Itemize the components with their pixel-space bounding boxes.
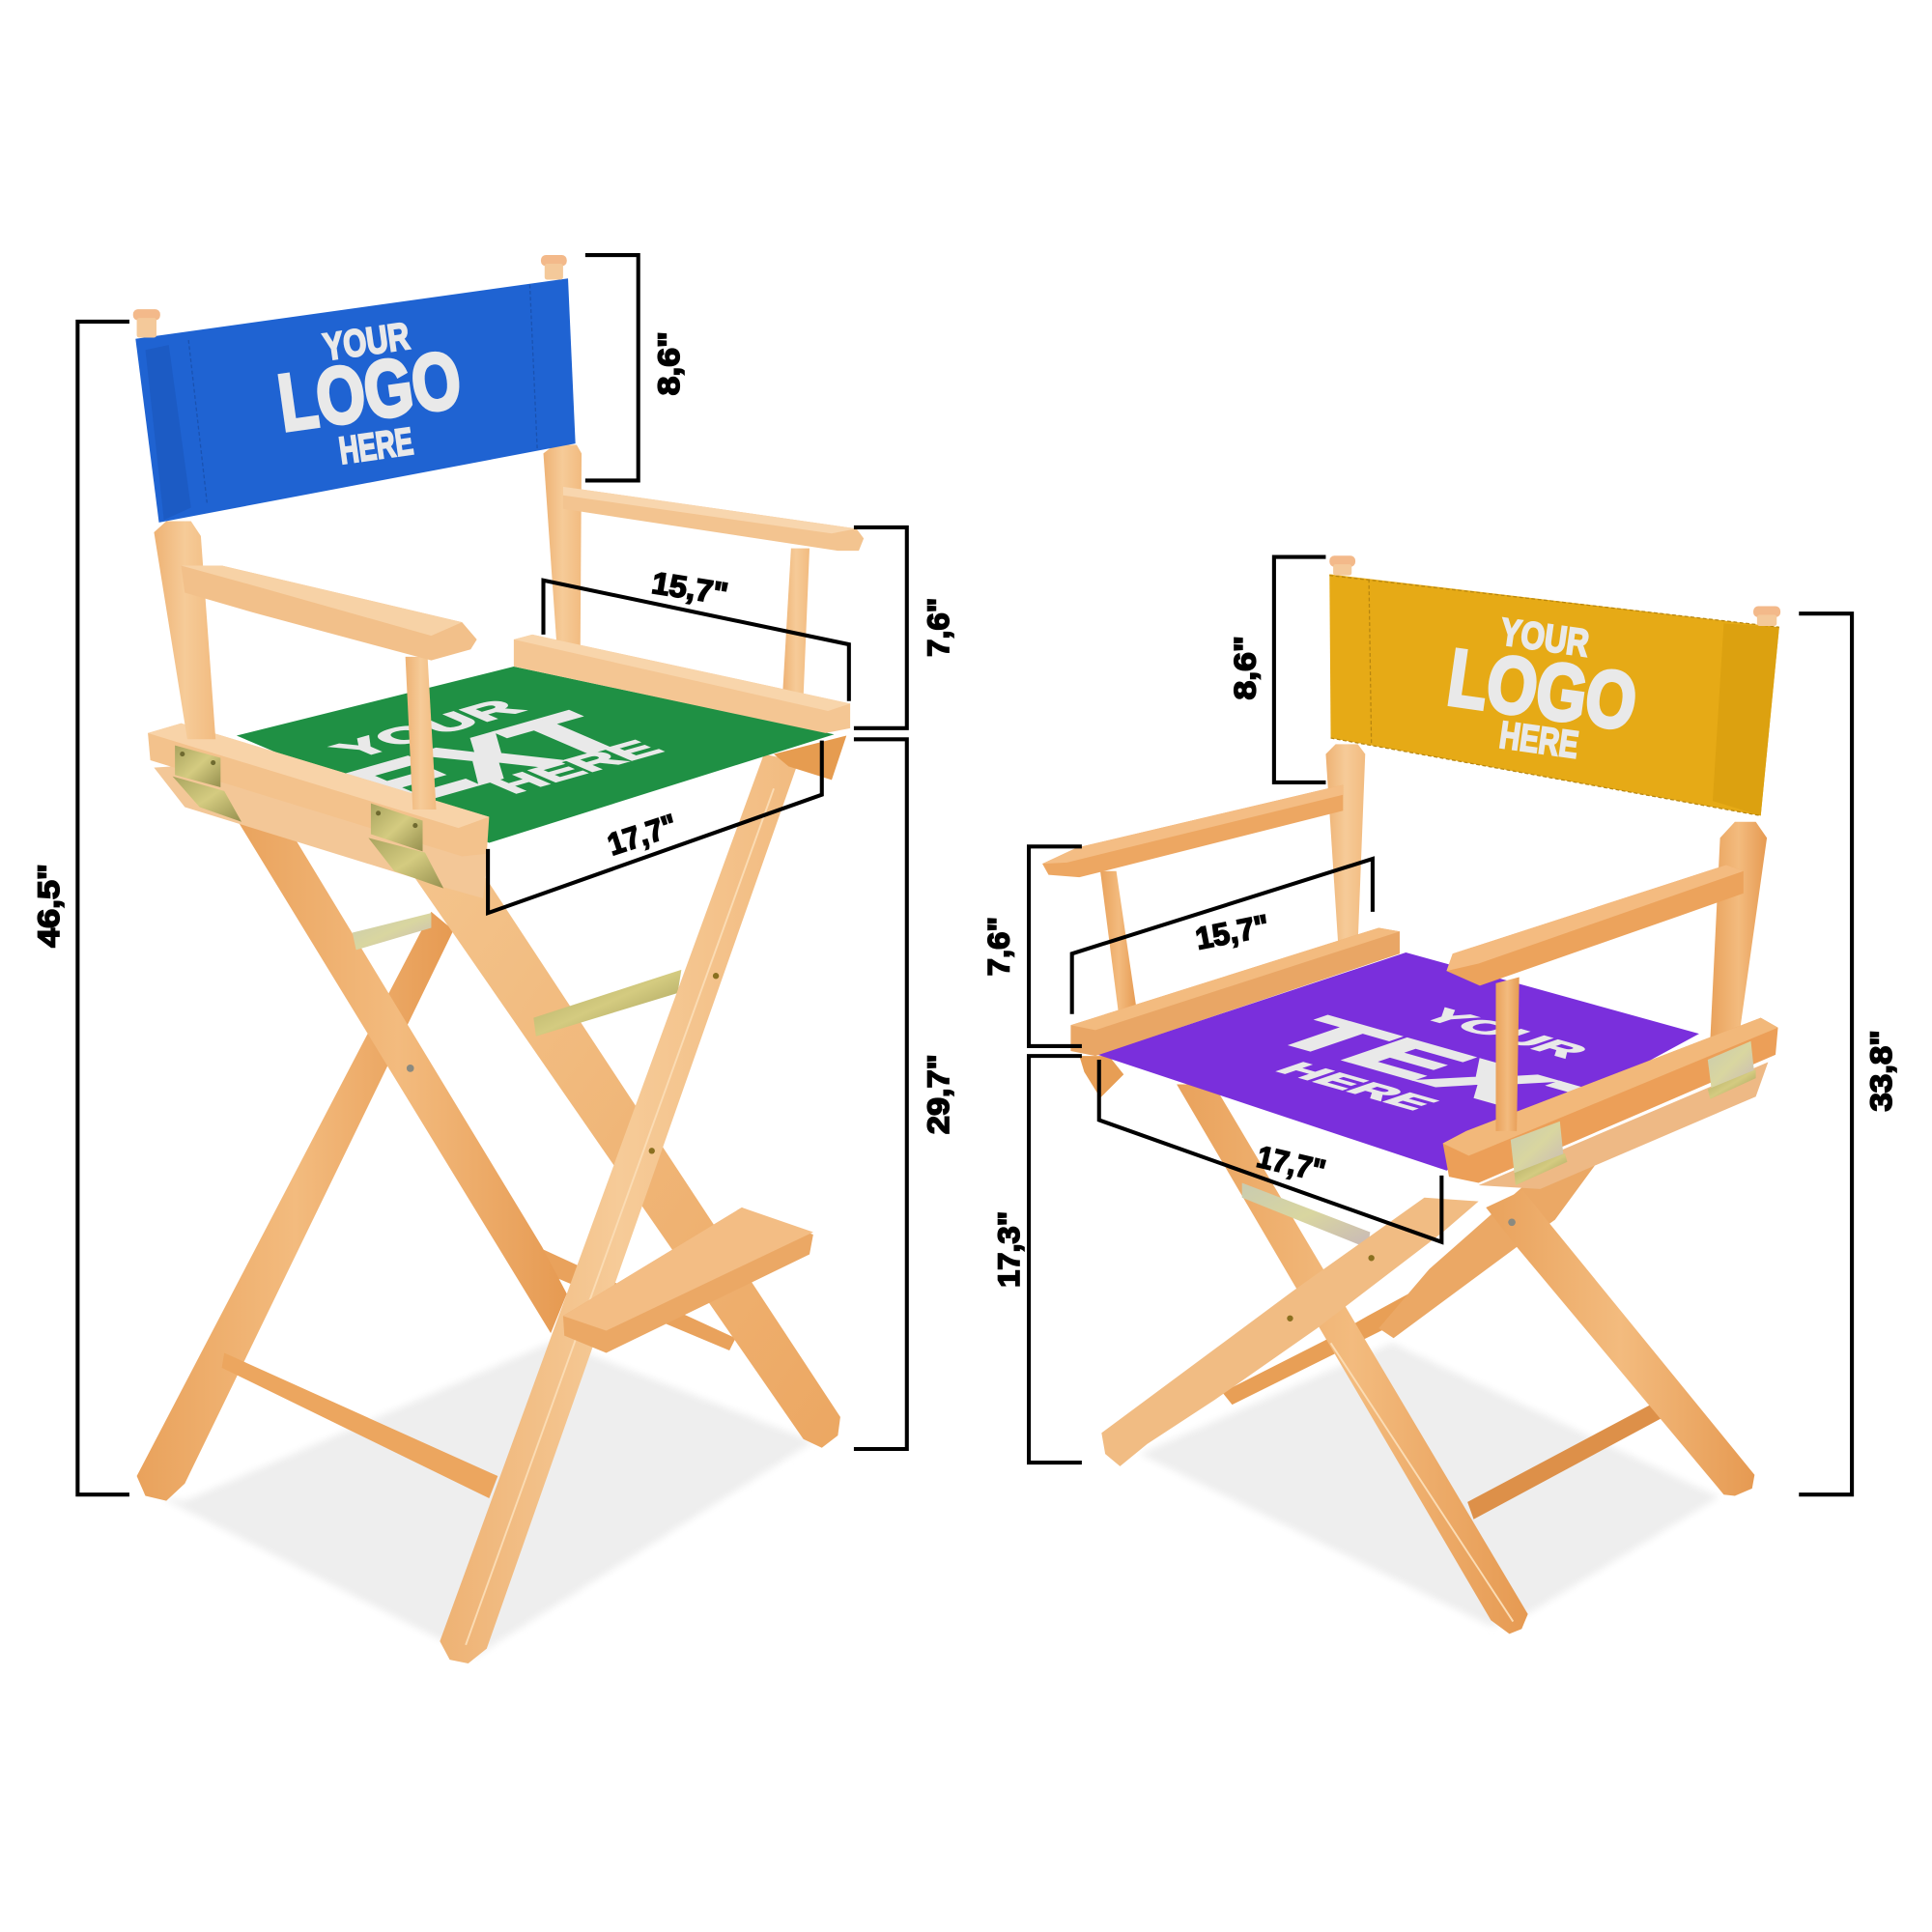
left armrest <box>1042 784 1343 877</box>
tall chair with blue back and green seat <box>133 255 864 1663</box>
right arm support <box>1495 977 1520 1131</box>
corner block <box>1079 1056 1123 1097</box>
dimension: seat depth 17,7 <box>488 741 822 913</box>
back post knobs <box>1329 555 1780 626</box>
left post <box>154 522 215 739</box>
hinges <box>173 746 443 889</box>
dimension: seat height 17,3 <box>991 1056 1082 1463</box>
left armrest <box>182 565 477 661</box>
lower seat rail <box>154 766 489 898</box>
standard chair with yellow back and purple seat <box>1042 555 1780 1634</box>
dimension: arm height 7,6: 7,6" <box>921 598 955 657</box>
dimension: seat depth 17,7 <box>1099 1060 1441 1242</box>
leg to right foot <box>1486 1190 1754 1495</box>
dimension: seat height 29,7 <box>854 739 955 1449</box>
main tall leg <box>440 754 799 1663</box>
dimension: seat depth 17,7: 17,7" <box>604 808 681 862</box>
back print: your logo here: YOUR <box>1497 611 1592 665</box>
near seat rail <box>148 724 489 856</box>
back canvas: yellow <box>1329 574 1779 815</box>
back leg <box>1378 1146 1609 1338</box>
seat print: your text here <box>327 701 665 798</box>
seat print: your text here: TEXT <box>1245 1009 1651 1130</box>
dimension: overall height 46,5 <box>31 322 129 1494</box>
rear diagonal leg <box>412 863 840 1448</box>
dimension: overall height 46,5: 46,5" <box>31 864 66 948</box>
near seat rail <box>1443 1018 1778 1182</box>
dimension: seat height 29,7: 29,7" <box>921 1054 955 1134</box>
dimension: seat height 17,3: 17,3" <box>991 1211 1026 1288</box>
lower seat rail <box>1479 1062 1768 1189</box>
footrest <box>563 1208 813 1353</box>
far seat rail <box>1070 927 1400 1056</box>
back canvas: blue <box>135 278 576 523</box>
seat print: your text here <box>1275 1007 1585 1111</box>
seat print: your text here: TEXT <box>240 702 657 837</box>
seat print: your text here: YOUR <box>1410 1006 1599 1062</box>
back curved stretcher <box>1222 1285 1433 1405</box>
back print: your logo here: HERE <box>1497 714 1581 767</box>
right post <box>1710 822 1767 1040</box>
left arm support <box>406 657 437 810</box>
dimension: arm height 7,6 <box>981 846 1082 1046</box>
back print: your logo here: YOUR <box>321 315 412 369</box>
front stretcher <box>222 1353 497 1498</box>
rear corner block <box>774 735 846 780</box>
small metal brace <box>353 913 431 950</box>
dimension: seat depth 17,7: 17,7" <box>1254 1139 1328 1188</box>
dimension: back height 8,6: 8,6" <box>651 331 686 395</box>
dimensions: standard chair <box>981 557 1898 1494</box>
hinges <box>1511 1041 1756 1185</box>
leg to front foot <box>1177 1084 1528 1634</box>
back post knobs <box>133 255 567 337</box>
floor shadow: tall chair <box>160 1341 813 1658</box>
dimension: seat width 15,7: 15,7" <box>1193 908 1272 956</box>
dimension: back height 8,6: 8,6" <box>1228 636 1263 699</box>
dimension: seat width 15,7 <box>543 565 849 701</box>
back stretcher <box>524 1244 735 1350</box>
dimensions: tall chair <box>31 255 955 1494</box>
seat print: your text here: HERE <box>1265 1059 1448 1114</box>
back left leg <box>137 912 453 1501</box>
leg pivot screw <box>407 1065 414 1072</box>
seat print: your text here: HERE <box>478 736 673 798</box>
back print: your logo here: HERE <box>336 420 415 472</box>
purple seat canvas <box>1097 952 1699 1171</box>
dimension: seat width 15,7: 15,7" <box>649 565 730 611</box>
right armrest <box>563 487 864 551</box>
seat print: your text here: YOUR <box>321 696 534 762</box>
dimension: back height 8,6 <box>1228 557 1325 782</box>
dimension: seat width 15,7 <box>1072 859 1373 1014</box>
dimension: arm height 7,6 <box>854 527 955 728</box>
back print: your logo here: LOGO <box>1443 632 1642 747</box>
left arm support <box>1100 871 1137 1015</box>
left post <box>1325 744 1365 944</box>
far seat rail <box>514 635 850 733</box>
right post <box>543 444 582 648</box>
right arm support <box>782 549 810 697</box>
front stretcher <box>1467 1397 1671 1520</box>
back print: your logo here <box>1439 605 1646 774</box>
front diagonal leg <box>229 807 567 1333</box>
long diagonal leg <box>1101 1198 1479 1466</box>
dimension: back height 8,6 <box>585 255 686 480</box>
metal brace <box>533 970 681 1037</box>
back print: your logo here <box>270 309 470 480</box>
right armrest <box>1446 865 1744 985</box>
dimension: overall height 33,8: 33,8" <box>1863 1030 1898 1112</box>
silver brace <box>1242 1182 1370 1248</box>
green seat canvas <box>237 667 835 842</box>
dimension: arm height 7,6: 7,6" <box>981 917 1016 976</box>
back print: your logo here: LOGO <box>273 334 467 448</box>
dimension: overall height 33,8 <box>1799 613 1898 1494</box>
floor shadow: standard chair <box>1140 1343 1719 1627</box>
